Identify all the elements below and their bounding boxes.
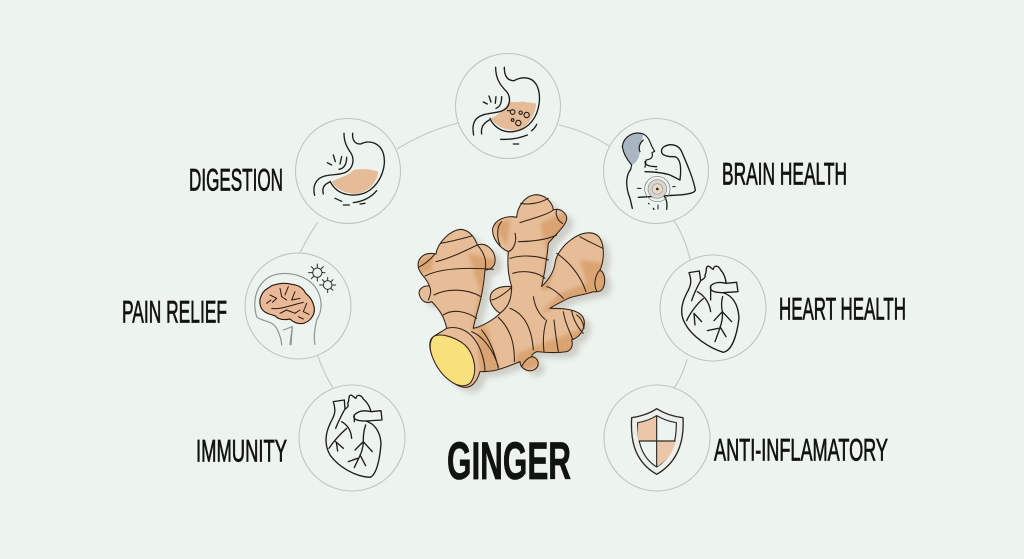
icon: stomach bbox=[314, 133, 384, 205]
panel: digestion bbox=[296, 118, 400, 224]
ginger shading bbox=[418, 210, 607, 377]
connecting ring bbox=[300, 123, 690, 388]
icon: shield bbox=[631, 409, 683, 474]
panel: immunity bbox=[299, 385, 405, 491]
label: immunity: IMMUNITY bbox=[196, 432, 287, 468]
ginger lines bbox=[418, 195, 605, 387]
ginger body bbox=[418, 195, 605, 387]
label: pain relief: PAIN RELIEF bbox=[122, 294, 227, 330]
icon: ginger root bbox=[418, 195, 611, 393]
panel: heart health bbox=[660, 255, 766, 361]
title: GINGER bbox=[447, 432, 571, 491]
icon: brain in head bbox=[255, 264, 336, 345]
icon: heart bbox=[326, 395, 382, 477]
label: brain health: BRAIN HEALTH bbox=[722, 156, 847, 192]
panel: brain health bbox=[604, 118, 708, 224]
label: heart health: HEART HEALTH bbox=[779, 290, 906, 326]
icon: heart bbox=[682, 266, 739, 352]
ginger cut face bbox=[430, 335, 475, 386]
label: digestion: DIGESTION bbox=[189, 162, 283, 198]
ginger shadow bbox=[425, 200, 611, 393]
label: anti-inflamatory: ANTI-INFLAMATORY bbox=[714, 432, 888, 468]
icon: flexing body bbox=[622, 133, 695, 209]
panel: pain relief bbox=[245, 253, 351, 359]
panel: anti-inflammatory bbox=[604, 385, 710, 491]
icon: stomach with bubbles bbox=[473, 67, 539, 144]
panel: top stomach bbox=[456, 54, 560, 158]
